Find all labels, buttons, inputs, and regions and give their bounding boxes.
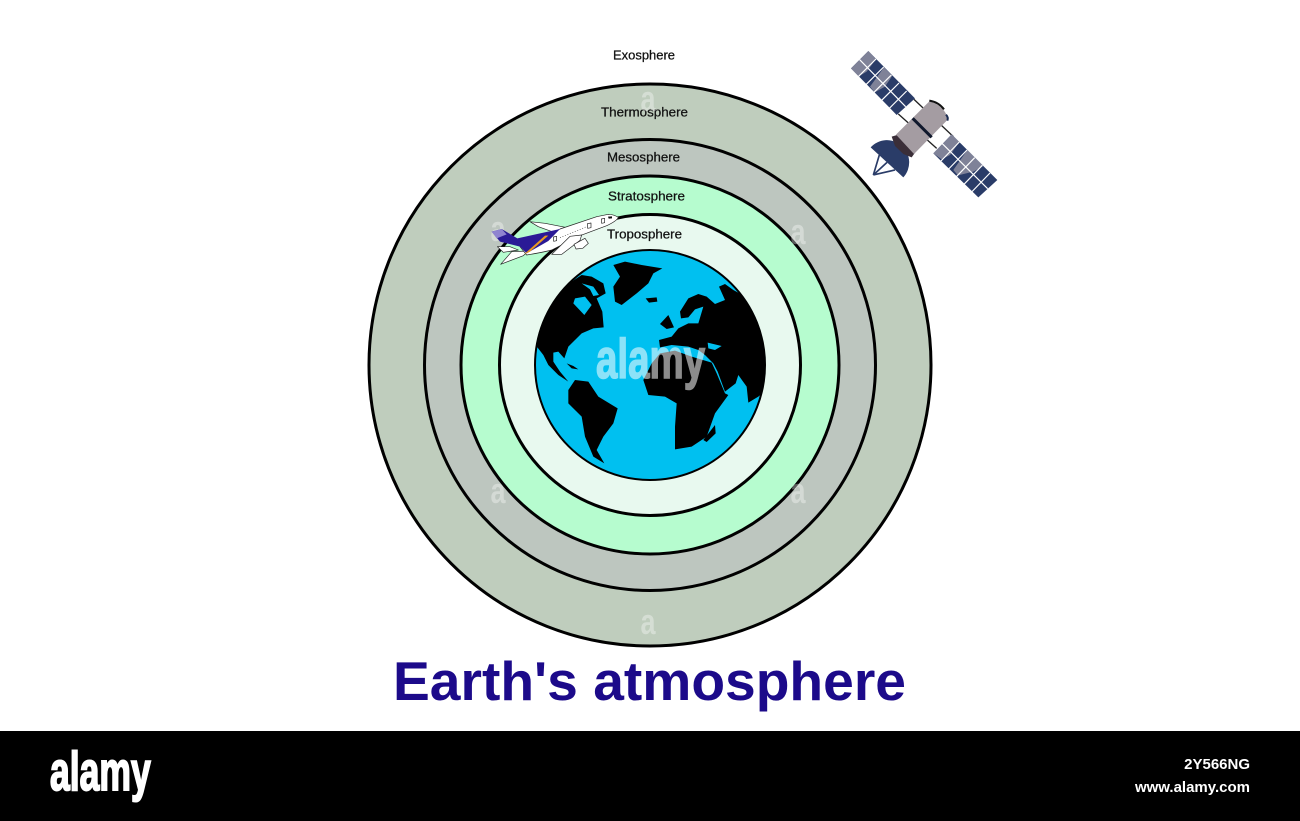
footer bar [0,731,1300,821]
watermark: small marks: a [790,211,806,252]
watermark: small marks [490,78,806,642]
icon: airplane [492,214,618,264]
atmosphere rings diagram [369,84,931,646]
label: exosphere: Exosphere [613,48,675,62]
watermark: small marks: a [790,470,806,511]
ring: troposphere [500,214,800,516]
ring: mesosphere [424,140,876,590]
watermark: small marks: a [490,208,506,249]
label: stratosphere: Stratosphere [608,190,685,204]
ring: stratosphere [461,176,839,554]
watermark: small marks: a [640,601,656,642]
watermark: alamy logo on globe: alamy [596,328,705,391]
footer url: www.alamy.com [1134,779,1250,796]
satellite body [892,101,948,157]
footer logo: alamy [50,740,151,802]
solar panel upper [851,51,915,115]
label: mesosphere: Mesosphere [607,150,680,164]
ring: thermosphere [369,84,931,646]
satellite dish [871,140,909,177]
label: troposphere: Troposphere [607,228,682,242]
icon: satellite [851,51,997,197]
solar panel lower [933,134,997,197]
watermark: small marks: a [490,470,506,511]
watermark: small marks: a [640,78,656,119]
icon: earth globe [532,250,778,480]
title: Earth's atmosphere [393,650,906,712]
footer image id: 2Y566NG [1184,756,1250,773]
label: thermosphere: Thermosphere [601,106,688,120]
